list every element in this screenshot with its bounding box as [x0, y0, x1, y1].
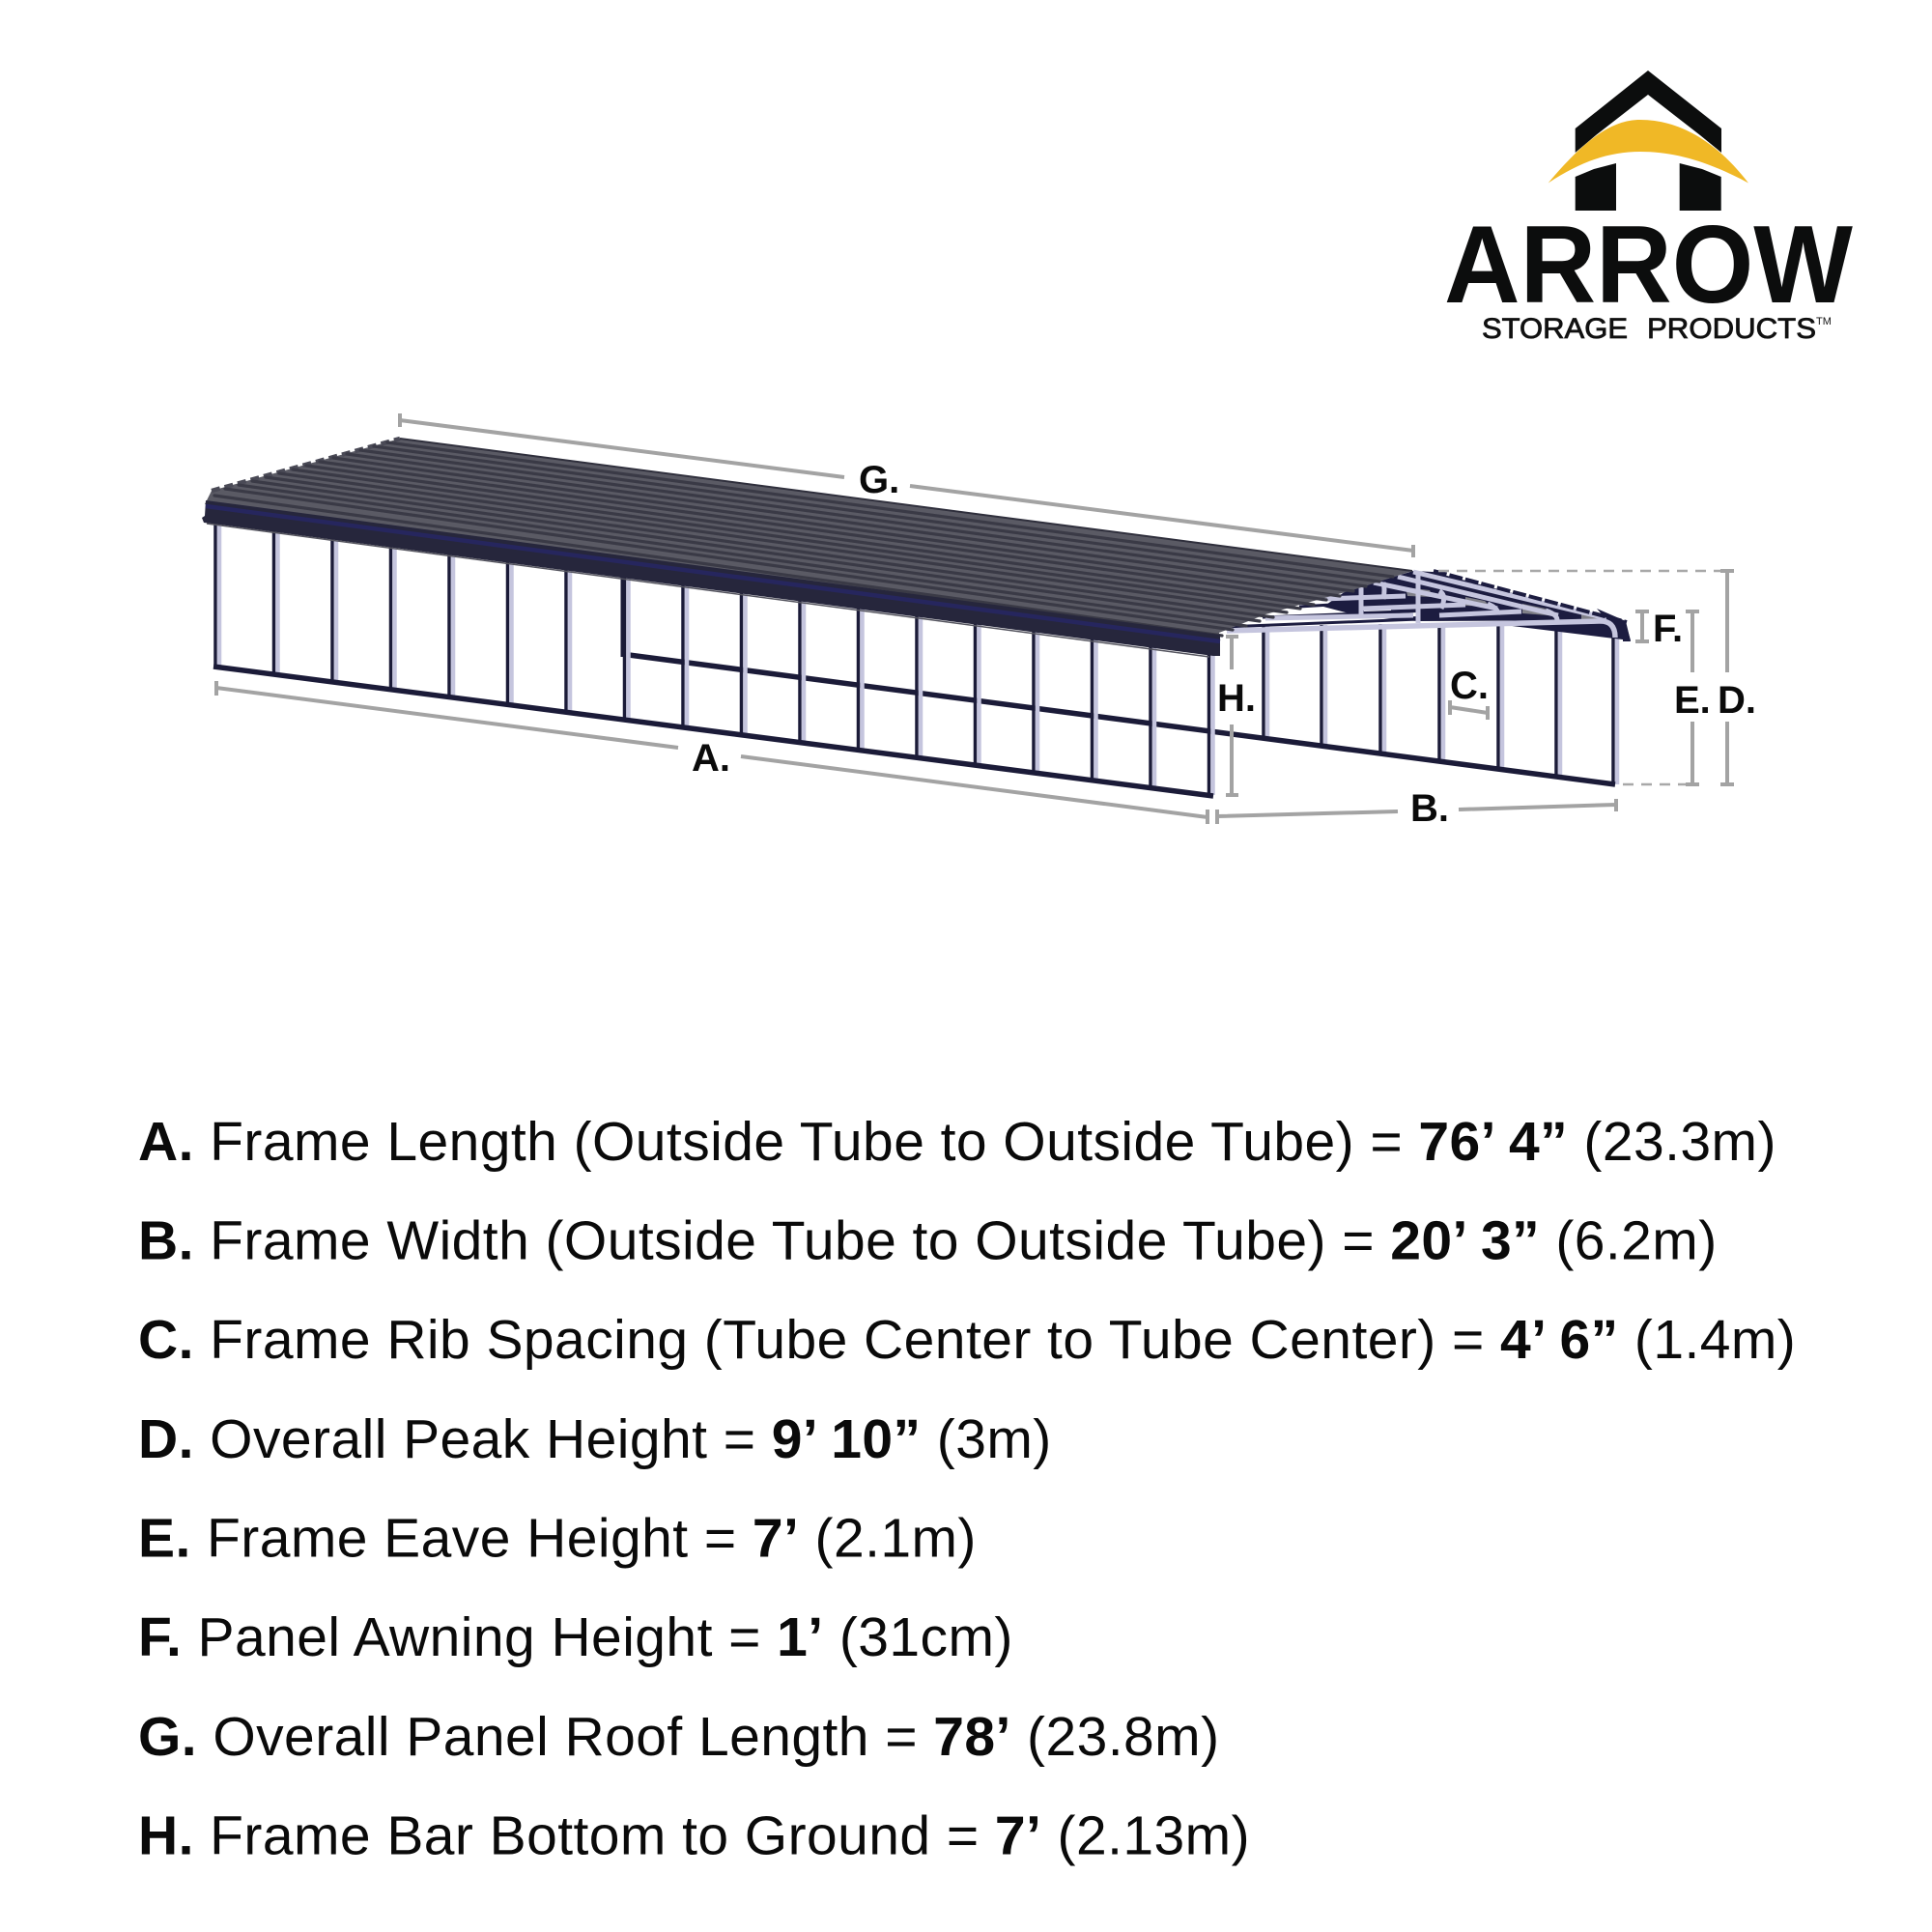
- dimension B: [1217, 787, 1616, 830]
- guide: peak dashed line: [1438, 570, 1720, 572]
- label B: B.: [1410, 787, 1449, 830]
- spec E: E. Frame Eave Height = 7’ (2.1m): [138, 1507, 977, 1569]
- specification list: [138, 1111, 1796, 1866]
- spec A: A. Frame Length (Outside Tube to Outside Tube) = 76’ 4” (23.3m): [138, 1111, 1776, 1173]
- dimension E: [1674, 611, 1711, 784]
- dimension A: [216, 681, 1208, 824]
- gable end panel edge: [1434, 571, 1631, 641]
- label F: F.: [1653, 608, 1683, 650]
- corrugated roof panel: [205, 439, 1412, 638]
- label H: H.: [1217, 677, 1256, 720]
- carport illustration: [202, 439, 1631, 796]
- dimension F: [1635, 608, 1683, 650]
- dimension D: [1718, 571, 1756, 784]
- logo tagline: STORAGE: [1482, 313, 1628, 345]
- label G: G.: [859, 459, 899, 501]
- dimension C: [1450, 665, 1489, 720]
- dimension G: [400, 413, 1413, 557]
- label D: D.: [1718, 679, 1756, 722]
- side wall posts: [215, 524, 1213, 795]
- far wall posts: [1264, 621, 1617, 784]
- rear wall bottom rail: [629, 655, 1615, 784]
- dimension H: [1217, 637, 1256, 795]
- spec B: B. Frame Width (Outside Tube to Outside Tube) = 20’ 3” (6.2m): [138, 1209, 1718, 1271]
- spec F: F. Panel Awning Height = 1’ (31cm): [138, 1606, 1013, 1668]
- logo icon: house with golden arc: [1548, 71, 1748, 211]
- roof fascia: [202, 500, 1220, 657]
- logo tagline: TM: [1816, 316, 1832, 327]
- gable roof underside: [1225, 571, 1631, 640]
- spec C: C. Frame Rib Spacing (Tube Center to Tube Center) = 4’ 6” (1.4m): [138, 1309, 1796, 1371]
- label C: C.: [1450, 665, 1489, 707]
- label E: E.: [1674, 679, 1711, 722]
- side wall bottom rail: [213, 667, 1213, 796]
- spec G: G. Overall Panel Roof Length = 78’ (23.8m): [138, 1706, 1220, 1768]
- gable frame tubes: [1227, 572, 1615, 638]
- logo: Arrow Storage Products: [1444, 71, 1853, 345]
- logo tagline: [1482, 313, 1832, 345]
- spec H: H. Frame Bar Bottom to Ground = 7’ (2.13m): [138, 1804, 1250, 1866]
- label A: A.: [692, 737, 730, 780]
- spec D: D. Overall Peak Height = 9’ 10” (3m): [138, 1408, 1052, 1470]
- logo tagline: PRODUCTS: [1647, 313, 1816, 345]
- guide: ground dashed line: [1623, 783, 1686, 785]
- logo wordmark: ARROW: [1444, 204, 1853, 327]
